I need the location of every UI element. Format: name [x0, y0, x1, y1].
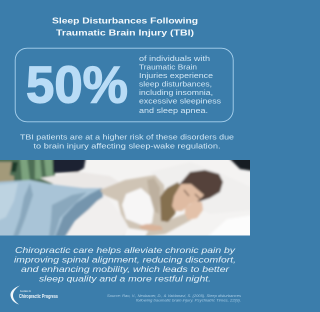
statistic description: of individuals with — [139, 54, 210, 63]
title: Sleep Disturbances Following — [52, 16, 198, 26]
source citation: Source: Rao, V., Neubauer, D., & Vaidanavi, S. (2005). Sleep disturbances — [107, 294, 241, 298]
statistic description: Injuries experience — [139, 71, 213, 80]
logo wordmark — [19, 289, 58, 300]
statistic description: including insomnia, — [139, 88, 213, 97]
infographic — [0, 16, 250, 304]
risk statement: to brain injury affecting sleep-wake regulation. — [34, 142, 220, 151]
source citation — [107, 294, 241, 302]
plant and dark backdrop — [0, 157, 55, 184]
source citation: following traumatic brain injury. Psychiatric Times, 22(9). — [136, 298, 241, 302]
statistic description: excessive sleepiness — [139, 97, 221, 106]
hands — [185, 201, 203, 220]
white pillow held in arms — [122, 188, 154, 226]
title: Traumatic Brain Injury (TBI) — [56, 28, 194, 38]
chiropractic care statement: improving spinal alignment, reducing discomfort, — [14, 254, 236, 264]
logo: Foundation for Chiropractic Progress — [10, 286, 58, 304]
white bedding — [40, 170, 116, 188]
panel: 50 percent statistic — [15, 48, 233, 122]
chiropractic care statement: Chiropractic care helps alleviate chronic pain by — [15, 245, 236, 255]
photo: woman sleeping in bed — [0, 157, 253, 239]
statistic description: sleep disturbances, — [139, 80, 212, 88]
chiropractic care statement: and enhancing mobility, which leads to better — [21, 264, 231, 274]
logo arc — [10, 286, 20, 304]
sweater arm — [100, 175, 191, 238]
statistic description: and sleep apnea. — [139, 106, 208, 115]
risk statement: TBI patients are at a higher risk of these disorders due — [20, 132, 234, 141]
statistic description: Traumatic Brain — [139, 62, 197, 72]
chiropractic care statement — [14, 245, 236, 283]
chiropractic care statement: sleep quality and a more restful night. — [39, 273, 211, 283]
hair — [178, 170, 223, 202]
blue blanket — [0, 180, 102, 237]
face — [172, 184, 204, 211]
logo wordmark: Chiropractic Progress — [19, 294, 58, 300]
risk statement — [20, 132, 234, 151]
title — [52, 16, 198, 38]
sheet foreground — [123, 227, 148, 236]
logo wordmark: Foundation for — [20, 289, 31, 293]
statistic description — [139, 54, 221, 115]
big number: 50%: 50% — [26, 56, 128, 114]
